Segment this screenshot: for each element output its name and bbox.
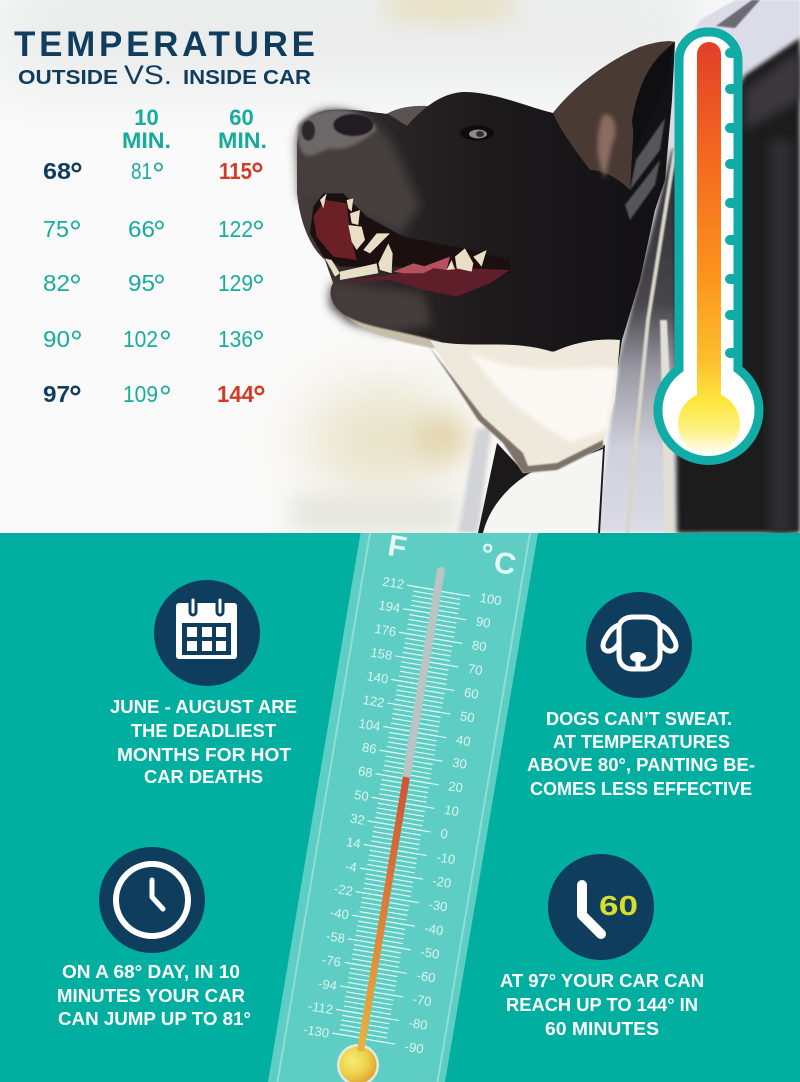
Fahrenheit scale labels: 176	[374, 621, 397, 639]
icon: clock hands with 60: 60	[599, 890, 638, 921]
dog white chest	[428, 340, 620, 473]
row 97: 144	[217, 381, 254, 407]
column heading: 60 min: MIN.	[218, 128, 267, 153]
Fahrenheit scale labels: 14	[345, 834, 362, 851]
left door post and door	[458, 425, 492, 533]
icon: dog face	[586, 592, 692, 698]
row 97: °	[159, 379, 172, 415]
Fahrenheit scale labels: -4	[344, 858, 358, 875]
Fahrenheit scale labels: 68	[357, 763, 374, 780]
row 75	[43, 214, 265, 250]
row 75: 75	[43, 216, 69, 242]
row 82: 129	[218, 270, 253, 296]
title: OUTSIDE	[18, 67, 118, 89]
Celsius scale labels: 0	[439, 826, 449, 842]
row 82	[43, 268, 265, 304]
red mercury column	[357, 777, 410, 1052]
Celsius scale labels: 30	[451, 755, 468, 772]
title: INSIDE CAR	[183, 67, 312, 89]
title: VS.	[124, 60, 172, 90]
dog head and neck	[297, 41, 675, 372]
Celsius degree ring: °	[478, 538, 495, 572]
row 97: 97	[43, 381, 70, 407]
tilted wall thermometer with Fahrenheit and Celsius scales	[268, 522, 538, 1082]
thermometer bulb	[337, 1044, 379, 1082]
text: 68 degree day	[57, 962, 251, 1029]
text: deadliest months: CAR DEATHS	[144, 767, 263, 787]
text: 97 degrees: REACH UP TO 144° IN	[506, 995, 698, 1015]
Celsius scale labels: -80	[408, 1015, 429, 1033]
Celsius scale labels: 100	[479, 590, 503, 608]
large thermometer graphic	[658, 32, 759, 460]
Fahrenheit scale labels: 86	[361, 740, 378, 757]
window frame	[662, 0, 800, 190]
row 82: °	[153, 268, 166, 304]
photo: dog leaning out of a car window	[0, 0, 800, 533]
Celsius scale labels: -50	[420, 944, 441, 962]
Celsius scale labels: 40	[455, 732, 472, 749]
text: deadliest months	[110, 697, 297, 787]
Celsius scale labels: -30	[427, 897, 448, 915]
row 90	[43, 324, 265, 360]
text: dogs can't sweat: DOGS CAN’T SWEAT.	[546, 709, 732, 729]
Celsius scale labels: 90	[475, 614, 492, 631]
muzzle	[297, 110, 420, 235]
column heading: 60 min	[218, 105, 267, 153]
row 82: 82	[43, 270, 70, 296]
row 68: 68	[43, 158, 71, 184]
row 97: 109	[123, 381, 158, 407]
icon: clock hands with 60	[548, 854, 654, 960]
text: deadliest months: THE DEADLIEST	[131, 721, 276, 741]
Fahrenheit scale labels: -22	[333, 881, 354, 899]
Fahrenheit scale labels: -76	[321, 952, 342, 970]
title	[14, 25, 315, 90]
Celsius letter: C	[491, 546, 518, 582]
far side of muzzle	[386, 106, 428, 126]
row 82: °	[252, 268, 265, 304]
Fahrenheit scale labels: 122	[362, 692, 386, 710]
Fahrenheit scale labels: 140	[366, 668, 389, 687]
text: 97 degrees: AT 97° YOUR CAR CAN	[500, 971, 704, 991]
text: 68 degree day: ON A 68° DAY, IN 10	[62, 962, 240, 982]
row 68: 81	[131, 158, 152, 184]
Celsius scale labels: 60	[463, 685, 480, 702]
eye	[460, 126, 494, 140]
text: dogs can't sweat: ABOVE 80°, PANTING BE-	[527, 755, 755, 775]
Fahrenheit scale labels: 32	[349, 811, 366, 828]
lower jaw	[330, 283, 432, 333]
column heading: 10 min	[122, 105, 171, 153]
column heading: 60 min: 60	[229, 105, 254, 130]
Celsius scale labels	[404, 590, 503, 1057]
Fahrenheit scale labels: 50	[353, 787, 370, 804]
text: deadliest months: JUNE - AUGUST ARE	[110, 697, 297, 717]
tick marks	[346, 587, 455, 1042]
row 75: °	[252, 214, 265, 250]
nose	[298, 110, 377, 156]
Fahrenheit scale labels	[302, 573, 405, 1041]
text: dogs can't sweat	[527, 709, 755, 799]
row 90: 102	[123, 326, 158, 352]
row 90: 136	[218, 326, 253, 352]
Fahrenheit scale labels: -40	[329, 905, 350, 922]
thermometer tube	[401, 566, 445, 785]
Celsius scale labels: -20	[431, 873, 452, 891]
row 75: 122	[218, 216, 253, 242]
Fahrenheit scale labels: 194	[377, 597, 401, 616]
row 97: °	[69, 379, 82, 415]
row 75: °	[69, 214, 82, 250]
Fahrenheit scale labels: 158	[370, 645, 393, 663]
Fahrenheit scale labels: -112	[307, 998, 334, 1017]
icon: clock	[99, 847, 205, 953]
Fahrenheit scale labels: -94	[317, 976, 338, 993]
text: 68 degree day: CAN JUMP UP TO 81°	[58, 1009, 251, 1029]
row 68: 115	[219, 158, 252, 184]
Celsius scale labels: -40	[423, 920, 445, 938]
dog mouth and teeth	[310, 193, 510, 297]
Celsius scale labels: 10	[443, 802, 460, 819]
Fahrenheit scale labels: -130	[302, 1022, 330, 1041]
row 75: 66	[128, 216, 155, 242]
text: dogs can't sweat: AT TEMPERATURES	[553, 732, 730, 752]
column heading: 10 min: MIN.	[122, 128, 171, 153]
text: 97 degrees: 60 MINUTES	[545, 1019, 659, 1039]
row 90: °	[159, 324, 172, 360]
row 68: °	[152, 156, 165, 192]
column heading: 10 min: 10	[134, 105, 159, 130]
Celsius scale labels: 80	[471, 637, 488, 654]
Celsius scale labels: 70	[467, 661, 484, 678]
title: TEMPERATURE	[14, 25, 315, 64]
chin highlight	[345, 315, 445, 350]
Fahrenheit scale labels: 104	[358, 716, 382, 734]
Celsius scale labels: -70	[412, 991, 433, 1009]
teal lower panel	[0, 533, 800, 1082]
Fahrenheit letter: F	[385, 529, 409, 565]
text: 68 degree day: MINUTES YOUR CAR	[57, 986, 245, 1006]
row 90: °	[252, 324, 265, 360]
Celsius scale labels: -90	[404, 1039, 425, 1057]
text: 97 degrees	[500, 971, 704, 1039]
temperature table	[43, 105, 267, 415]
Fahrenheit scale labels: -58	[325, 928, 346, 946]
Celsius scale labels: -10	[435, 849, 456, 867]
text: deadliest months: MONTHS FOR HOT	[117, 745, 291, 765]
row 82: °	[69, 268, 82, 304]
dark car interior	[675, 38, 800, 533]
text: dogs can't sweat: COMES LESS EFFECTIVE	[530, 779, 752, 799]
row 68: °	[70, 156, 83, 192]
window pillar	[600, 146, 680, 533]
row 68	[43, 156, 264, 192]
row 82: 95	[128, 270, 155, 296]
ear	[553, 41, 675, 220]
row 75: °	[153, 214, 166, 250]
Celsius scale labels: 50	[459, 708, 476, 725]
row 97: °	[253, 379, 266, 415]
row 90: 90	[43, 326, 70, 352]
Fahrenheit scale labels: 212	[381, 574, 405, 592]
row 97	[43, 379, 266, 415]
Celsius scale labels: 20	[447, 778, 464, 795]
Celsius scale labels: -60	[416, 968, 437, 986]
row 90: °	[70, 324, 83, 360]
row 68: °	[251, 156, 264, 192]
icon: calendar	[154, 580, 260, 686]
